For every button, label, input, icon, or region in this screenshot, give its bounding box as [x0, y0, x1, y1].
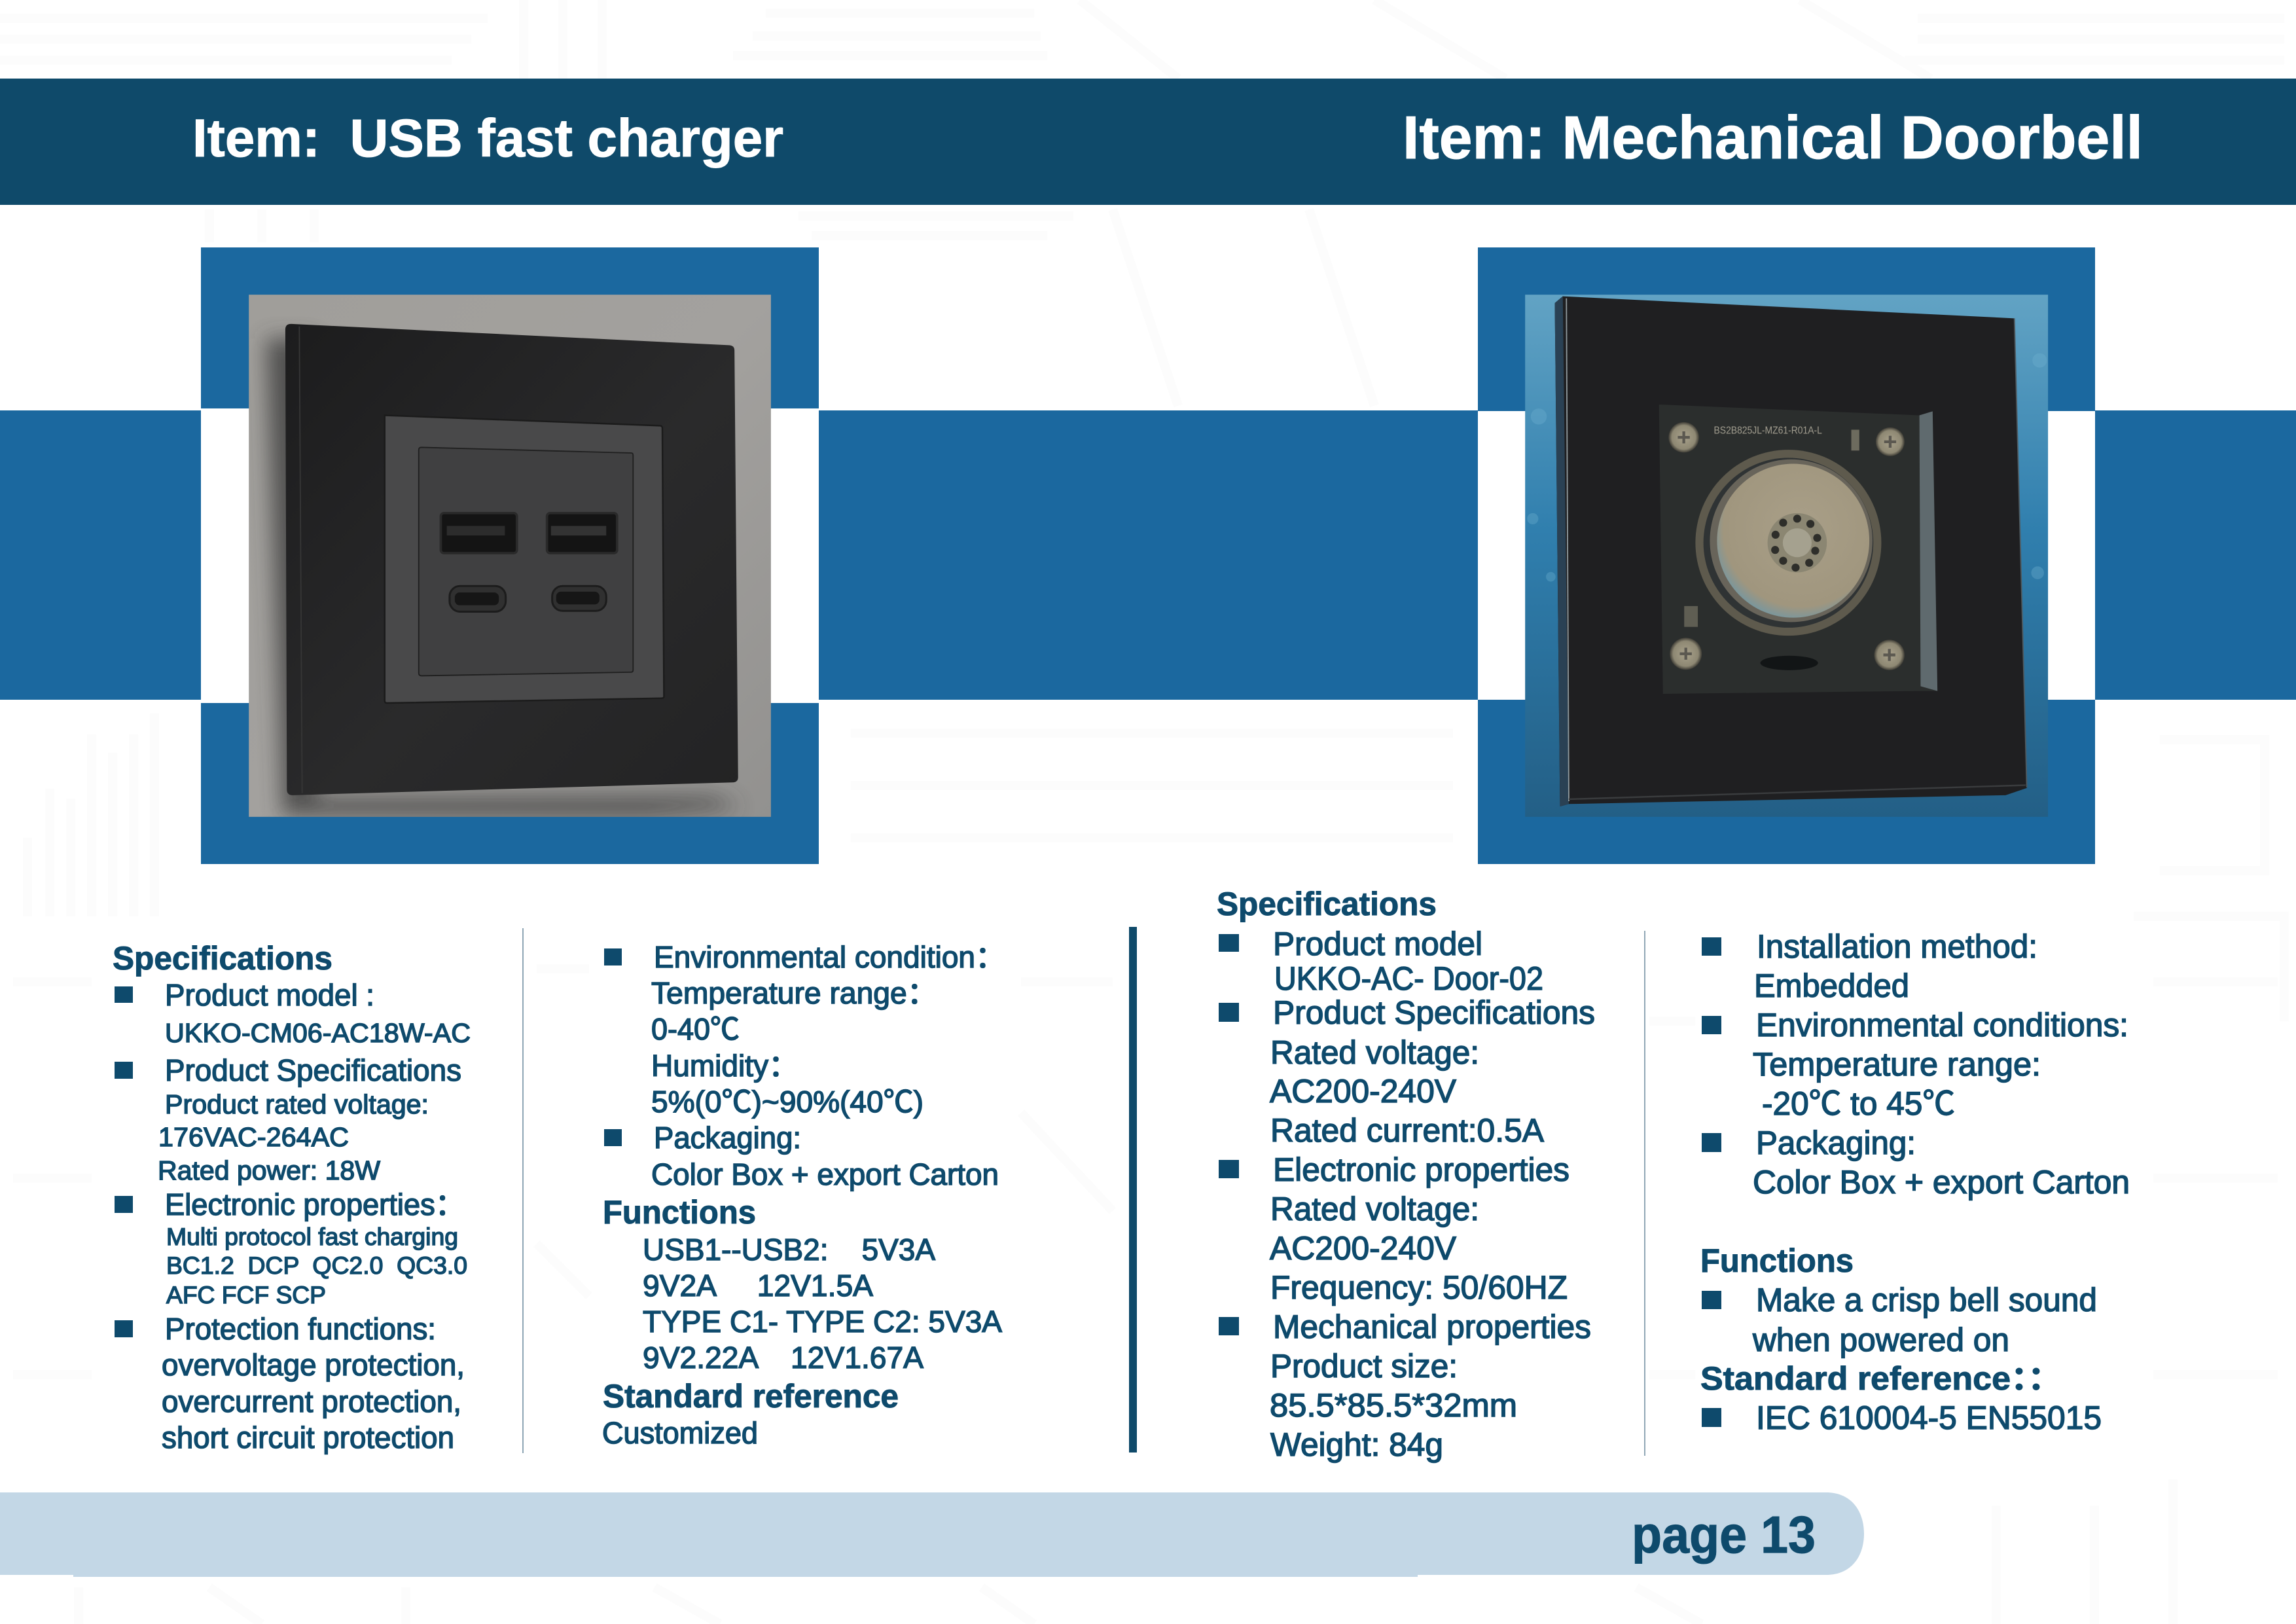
- text block: functions: [643, 1233, 1002, 1375]
- bullet list: installation and conditions: Color Box + export Carton: [1753, 1164, 2130, 1200]
- plate: [1555, 297, 2027, 806]
- bullet: function description: [1702, 1282, 2097, 1358]
- bullet list: specifications: Product rated voltage:: [165, 1089, 429, 1119]
- bullet list: installation and conditions: Environmental conditions:: [1756, 1007, 2128, 1043]
- text block: functions: 9V2A 12V1.5A: [643, 1269, 873, 1303]
- bullet list: specifications: 176VAC-264AC: [158, 1122, 349, 1152]
- bullet list: specifications: Mechanical properties: [1273, 1308, 1591, 1345]
- bullet list: specifications: Electronic properties：: [165, 1187, 465, 1221]
- text block: functions: TYPE C1- TYPE C2: 5V3A: [643, 1305, 1002, 1339]
- heading: Standard reference: Standard reference：：: [1700, 1360, 2062, 1397]
- bullet list: installation and conditions: Installation method:: [1757, 928, 2037, 965]
- bullet list: specifications: [115, 978, 471, 1454]
- bullet list: conditions: Packaging:: [654, 1121, 801, 1155]
- bullet list: specifications: Rated current:0.5A: [1270, 1112, 1545, 1149]
- bullet list: specifications: AFC FCF SCP: [166, 1282, 326, 1308]
- bullet list: installation and conditions: -20℃ to 45℃: [1762, 1085, 1955, 1122]
- bullet list: conditions: 0-40℃: [651, 1012, 740, 1046]
- footer bar: [0, 1492, 1864, 1577]
- bullet list: specifications: Rated voltage:: [1270, 1034, 1479, 1071]
- horizontal blue band: [0, 410, 2296, 700]
- panel: doorbell specs column 1: [1217, 886, 1595, 1463]
- plate: [285, 324, 738, 795]
- bullet: function description: when powered on: [1752, 1322, 2009, 1358]
- panel: charger photo frame: [201, 247, 819, 864]
- bullet list: specifications: Electronic properties: [1273, 1151, 1570, 1188]
- bullet list: specifications: short circuit protection: [162, 1420, 454, 1454]
- bullet list: specifications: Product model: [1273, 926, 1482, 962]
- bullet list: specifications: Product model :: [165, 978, 374, 1012]
- bullet list: conditions: Temperature range：: [651, 976, 937, 1010]
- bullet list: specifications: UKKO-AC- Door-02: [1274, 960, 1543, 997]
- USB-A ports: [440, 513, 617, 553]
- bullet list: conditions: 5%(0℃)~90%(40℃): [651, 1085, 924, 1119]
- bullet list: specifications: overcurrent protection,: [162, 1384, 461, 1418]
- bullet list: conditions: Environmental condition：: [654, 940, 1005, 974]
- bullet list: specifications: [1219, 926, 1595, 1463]
- screws: [1668, 422, 1905, 670]
- panel: charger specs column 2: [602, 940, 1005, 1450]
- panel: charger specs column 1: [113, 940, 471, 1454]
- text block: functions: 9V2.22A 12V1.67A: [643, 1341, 924, 1375]
- bullet list: specifications: Product size:: [1270, 1348, 1458, 1384]
- frame: [385, 415, 664, 703]
- bell: [1695, 450, 1881, 636]
- header band: [0, 79, 2296, 205]
- bullet list: installation and conditions: Temperature range:: [1753, 1046, 2041, 1083]
- bullet list: specifications: BC1.2 DCP QC2.0 QC3.0: [166, 1252, 467, 1279]
- panel: doorbell specs column 2: [1700, 928, 2130, 1436]
- bullet list: conditions: Humidity：: [651, 1049, 798, 1083]
- panel: doorbell photo frame: [1478, 247, 2095, 864]
- label print: BS2B825JL-MZ61-R01A-L: [1714, 425, 1822, 437]
- bullet: function description: Make a crisp bell sound: [1756, 1282, 2097, 1318]
- bullet list: specifications: UKKO-CM06-AC18W-AC: [165, 1018, 471, 1048]
- bullet list: specifications: 85.5*85.5*32mm: [1270, 1387, 1517, 1424]
- text block: functions: USB1--USB2: 5V3A: [643, 1233, 935, 1267]
- bullet list: conditions: Color Box + export Carton: [651, 1157, 999, 1191]
- page number: page 13: [1632, 1506, 1816, 1564]
- bullet list: specifications: Protection functions:: [165, 1312, 436, 1346]
- bullet list: specifications: Weight: 84g: [1270, 1426, 1443, 1463]
- heading: Standard reference: Standard reference: [603, 1378, 899, 1415]
- bullet list: installation and conditions: Packaging:: [1756, 1125, 1916, 1161]
- bullet list: specifications: Product Specifications: [165, 1053, 461, 1087]
- title: USB fast charger: Item: USB fast charger: [192, 109, 783, 168]
- bullet list: installation and conditions: Embedded: [1754, 967, 1909, 1004]
- bullet: standard: IEC 610004-5 EN55015: [1756, 1399, 2102, 1436]
- inner panel: [419, 447, 633, 676]
- bullet list: specifications: AC200-240V: [1270, 1230, 1457, 1267]
- window: bell mount: [1659, 405, 1937, 694]
- central divider: [1129, 927, 1137, 1453]
- heading: Functions: Functions: [603, 1194, 756, 1231]
- text block: customized: Customized: [602, 1416, 758, 1450]
- USB-C ports: [450, 586, 606, 611]
- bullet list: specifications: Product Specifications: [1273, 994, 1595, 1031]
- title: Mechanical Doorbell: Item: Mechanical Doorbell: [1403, 103, 2143, 171]
- bullet list: specifications: overvoltage protection,: [162, 1348, 465, 1382]
- photo: mechanical doorbell: [1525, 295, 2048, 817]
- bullet list: specifications: Rated power: 18W: [158, 1155, 380, 1185]
- heading: Functions: Functions: [1700, 1242, 1854, 1279]
- heading: Specifications: Specifications: [113, 940, 332, 977]
- bullet list: conditions: [604, 940, 1005, 1191]
- bullet list: specifications: Multi protocol fast charging: [166, 1223, 458, 1250]
- bullet list: specifications: AC200-240V: [1270, 1073, 1457, 1110]
- heading: Specifications: Specifications: [1217, 886, 1437, 922]
- photo: USB fast charger wall socket: [249, 295, 771, 817]
- bullet list: specifications: Frequency: 50/60HZ: [1270, 1269, 1568, 1306]
- bullet list: specifications: Rated voltage:: [1270, 1191, 1479, 1227]
- bullet list: installation and conditions: [1702, 928, 2130, 1200]
